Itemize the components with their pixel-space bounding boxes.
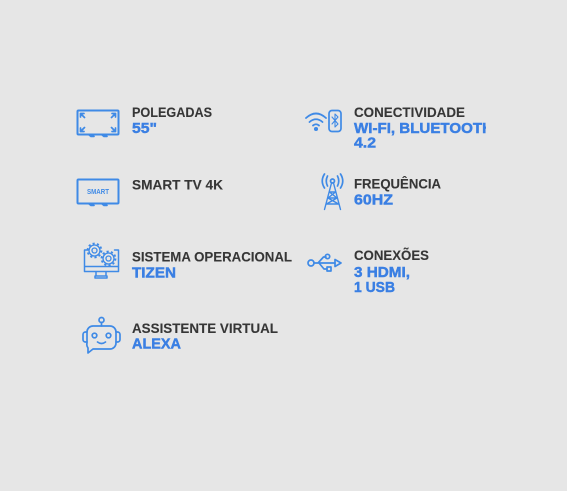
icon: operating system gears [84, 244, 118, 278]
value: 3 hdmi: 3 HDMI, [354, 265, 410, 281]
icon: usb [308, 254, 341, 271]
icon: smart tv: SMART [87, 189, 110, 196]
label: sistema operacional: SISTEMA OPERACIONAL [132, 250, 292, 264]
value: 1 usb: 1 USB [354, 280, 395, 296]
value: 60hz: 60HZ [354, 192, 393, 208]
icon: robot assistant [83, 318, 120, 353]
value: tizen: TIZEN [132, 266, 176, 282]
value: alexa: ALEXA [132, 336, 182, 352]
icon: screen size [78, 110, 118, 136]
label: smart tv 4k: SMART TV 4K [132, 178, 223, 192]
value: 4.2: 4.2 [354, 136, 376, 152]
icon: wifi and bluetooth [306, 110, 341, 132]
label: conectividade: CONECTIVIDADE [354, 105, 465, 120]
label: frequencia: FREQUÊNCIA [354, 176, 441, 192]
label: polegadas: POLEGADAS [132, 105, 212, 120]
label: conexoes: CONEXÕES [354, 248, 429, 263]
icon: frequency tower [322, 174, 343, 210]
value: wi-fi, bluetooth: WI-FI, BLUETOOTH [354, 121, 493, 137]
value: 55 inches: 55" [132, 121, 157, 137]
icon: smart tv [78, 180, 118, 205]
label: assistente virtual: ASSISTENTE VIRTUAL [132, 321, 278, 336]
